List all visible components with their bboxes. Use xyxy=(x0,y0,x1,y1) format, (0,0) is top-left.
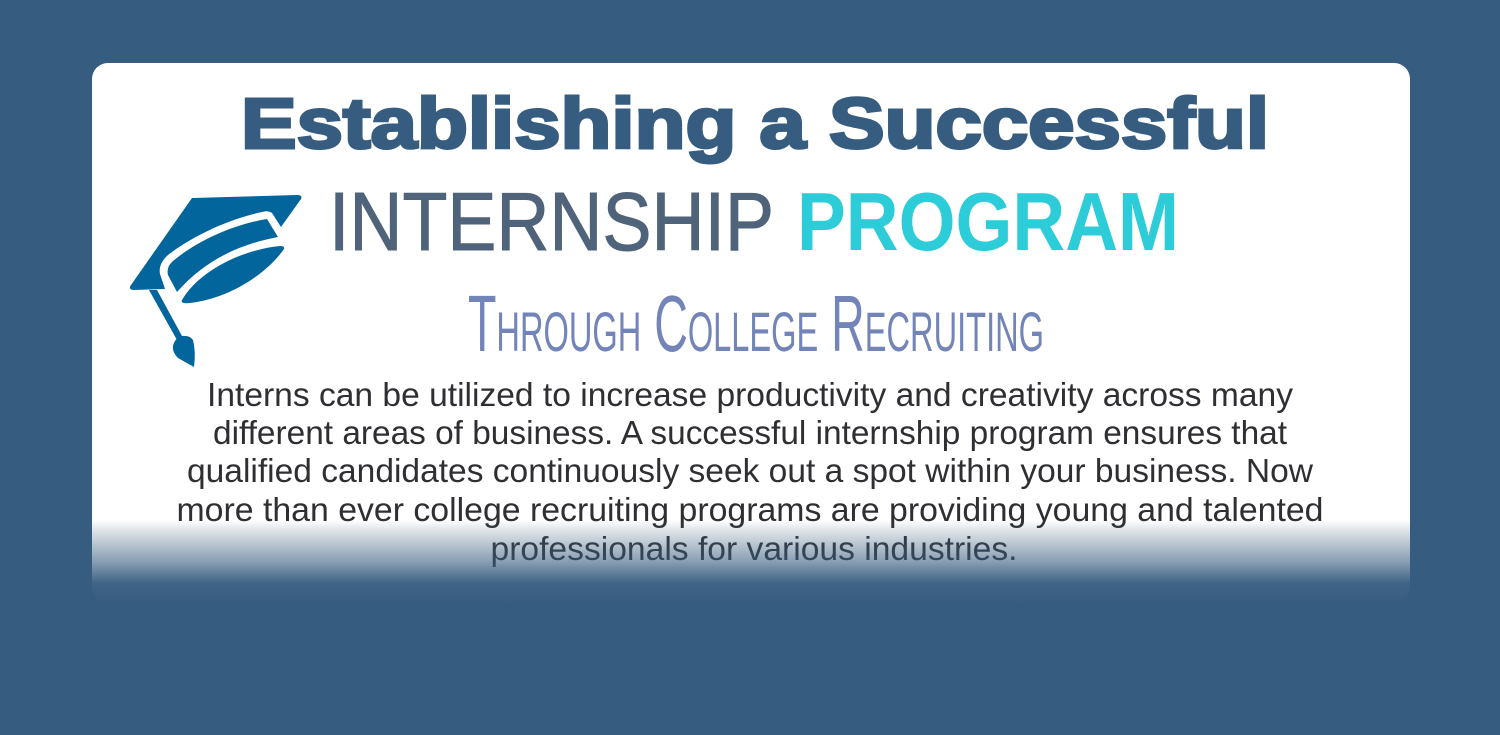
text block: introduction: more than ever college recruiting programs are providing young and talented xyxy=(176,491,1324,528)
text block: introduction: qualified candidates continuously seek out a spot within your business. Now xyxy=(187,452,1313,489)
text block: introduction: professionals for various industries. xyxy=(490,530,1018,567)
icon: graduation cap xyxy=(130,195,302,367)
text block: introduction: Interns can be utilized to increase productivity and creativity across many xyxy=(207,376,1293,413)
heading: internship program: PROGRAM xyxy=(797,175,1179,268)
heading: internship program xyxy=(329,175,1179,268)
panel: white card xyxy=(92,63,1410,603)
title: Establishing a Successful xyxy=(241,85,1269,164)
subtitle: Through College Recruiting xyxy=(468,279,1044,368)
text block: introduction xyxy=(176,376,1324,567)
text block: introduction: different areas of business. A successful internship program ensures that xyxy=(213,414,1287,451)
heading: internship program: INTERNSHIP xyxy=(329,175,774,268)
gradient fade overlay xyxy=(92,520,1410,604)
